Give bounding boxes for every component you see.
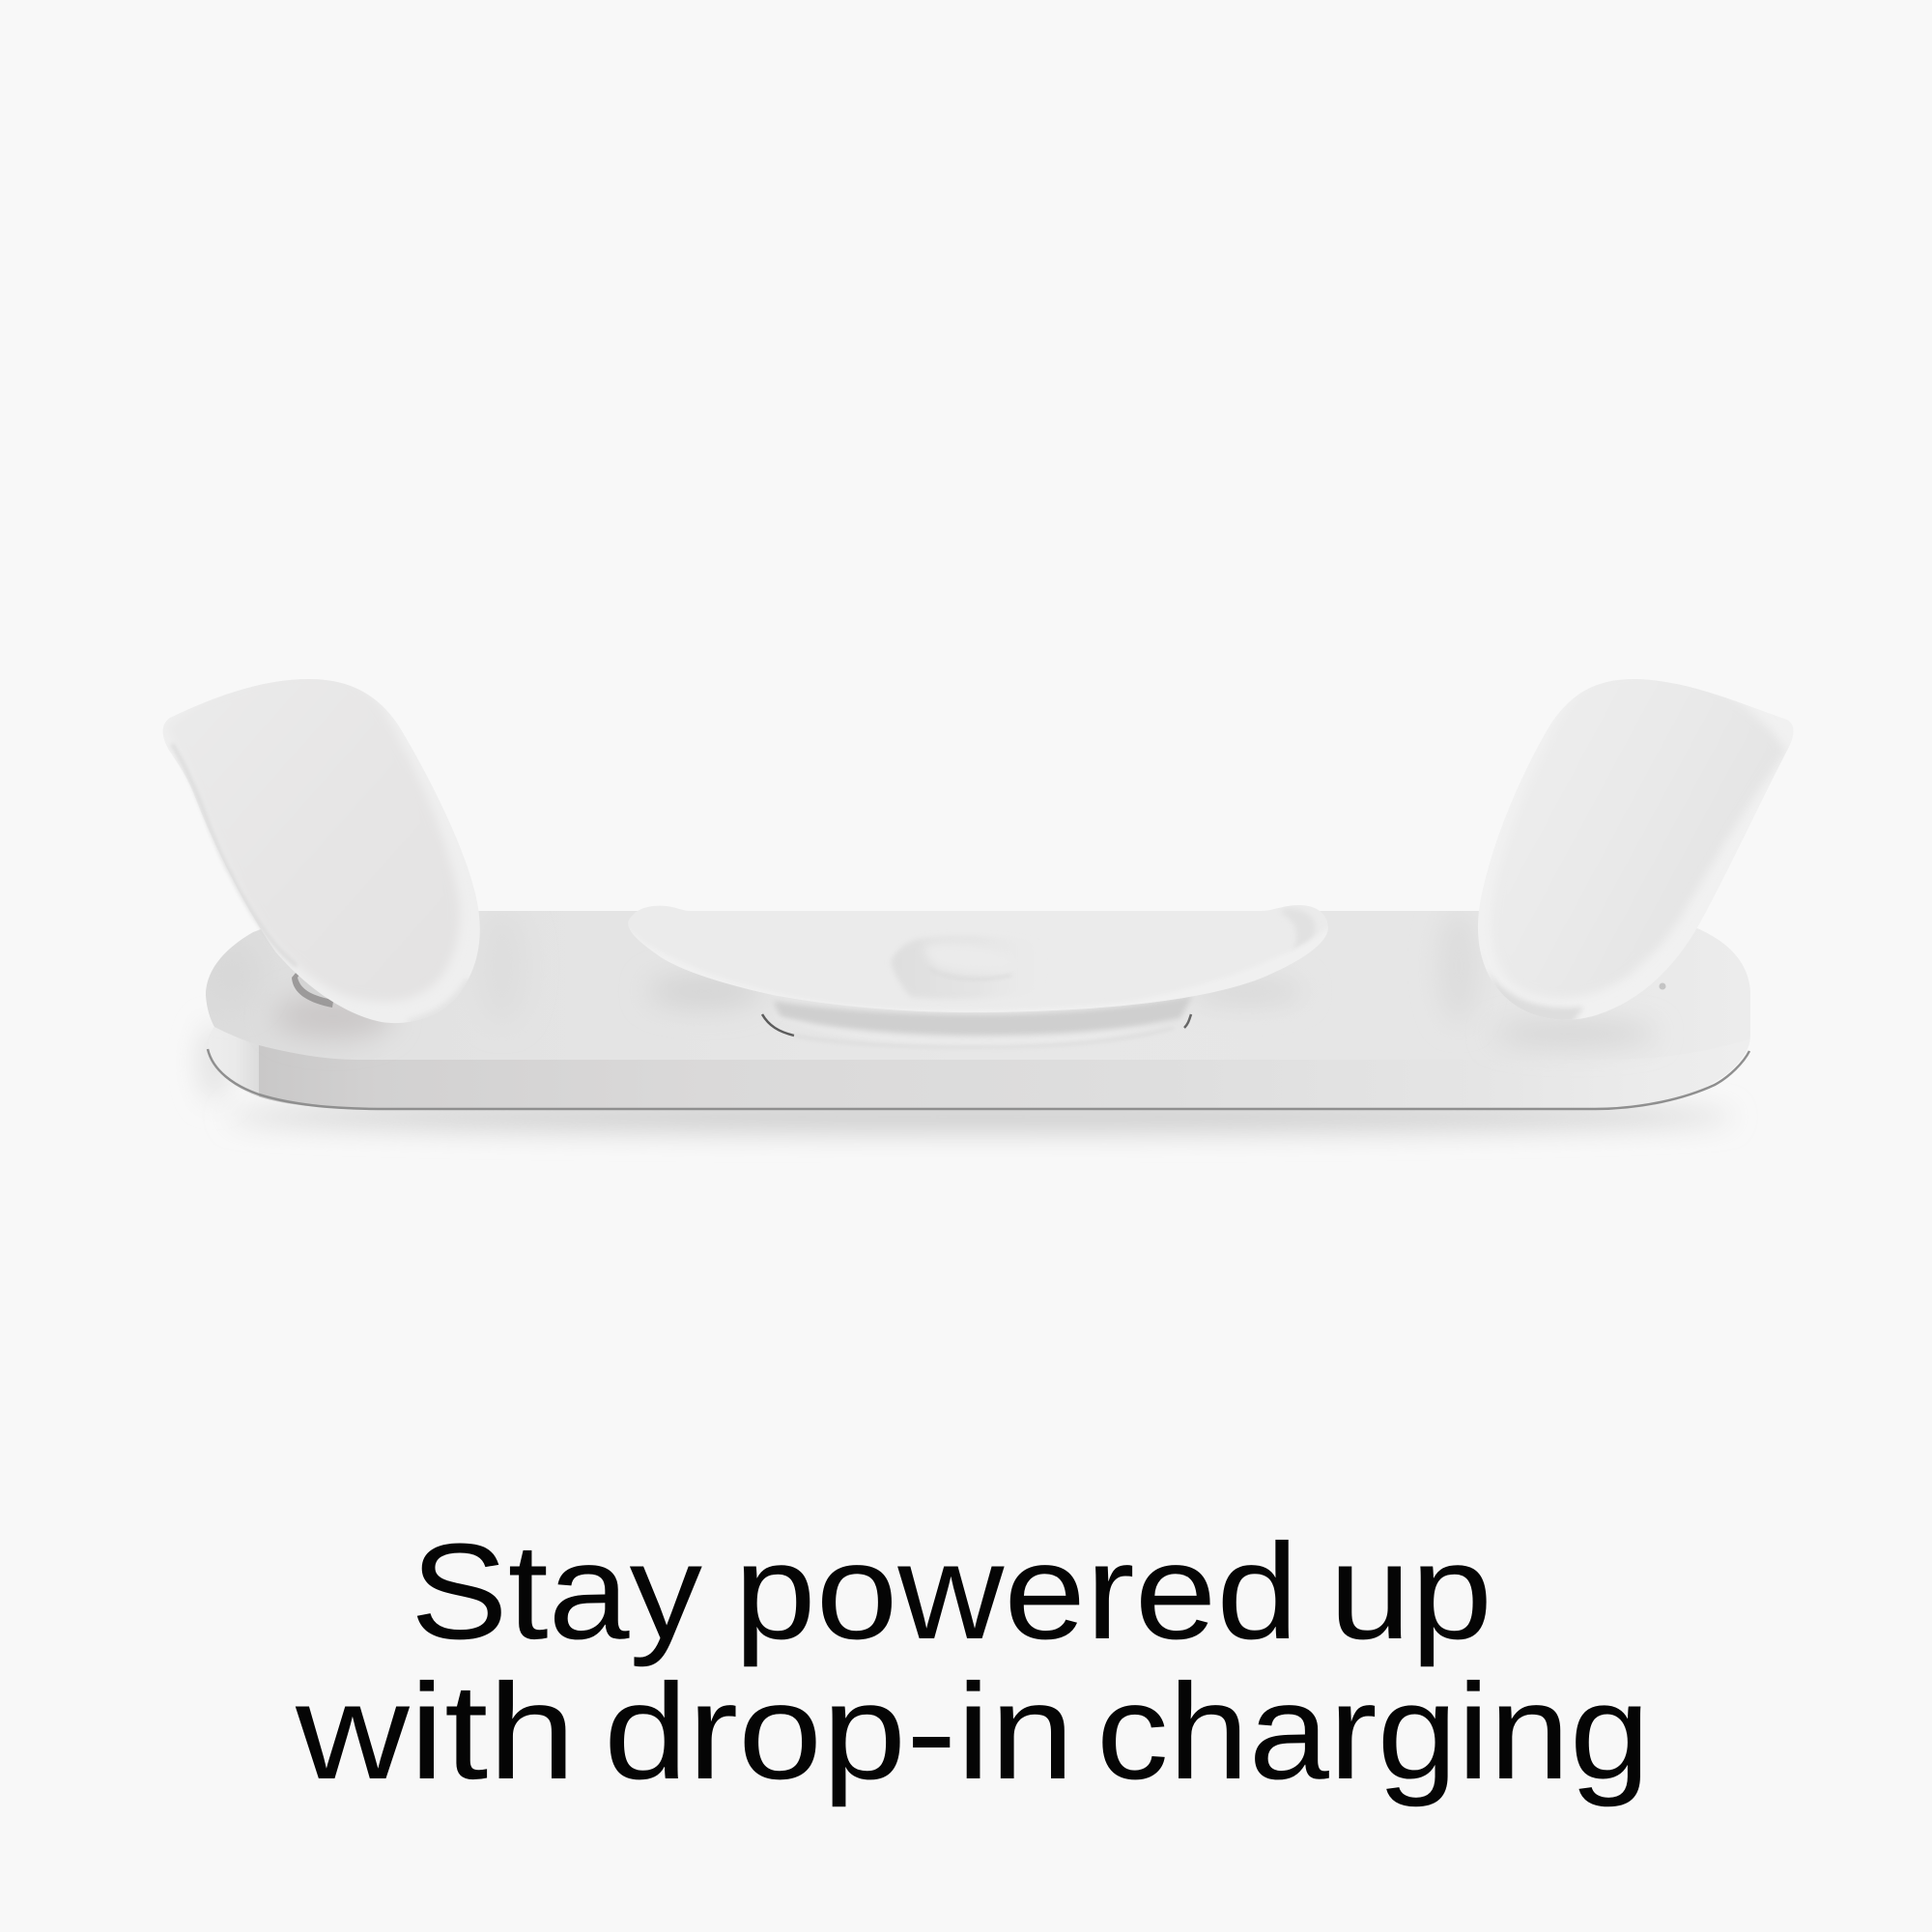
headline line 2: charging [1096,1655,1650,1807]
infographic canvas [163,679,1789,1806]
headline line 1: up [1329,1515,1492,1667]
base bottom edge [208,1049,1749,1109]
headline line 1: Stay [411,1515,703,1667]
base shadow [199,1024,1734,1131]
headline [295,1515,1650,1807]
headline line 2: with [295,1655,576,1807]
shadows cast on the base [273,993,393,1039]
dimple in plate [891,936,1044,999]
headline line 2: drop-in [604,1655,1074,1807]
dish inner rim line [172,744,297,966]
charging base [198,908,1750,1111]
headline line 1: powered [734,1515,1298,1667]
hinge [292,966,334,1008]
central wireless charging puck [762,995,1193,1047]
right charging cradle [1478,668,1793,1034]
headline line 2 [295,1655,1650,1807]
headline line 1 [411,1515,1492,1667]
left charging cradle [163,670,481,1038]
charging station product illustration [163,668,1793,1131]
central watch and device plate [631,905,1327,1012]
